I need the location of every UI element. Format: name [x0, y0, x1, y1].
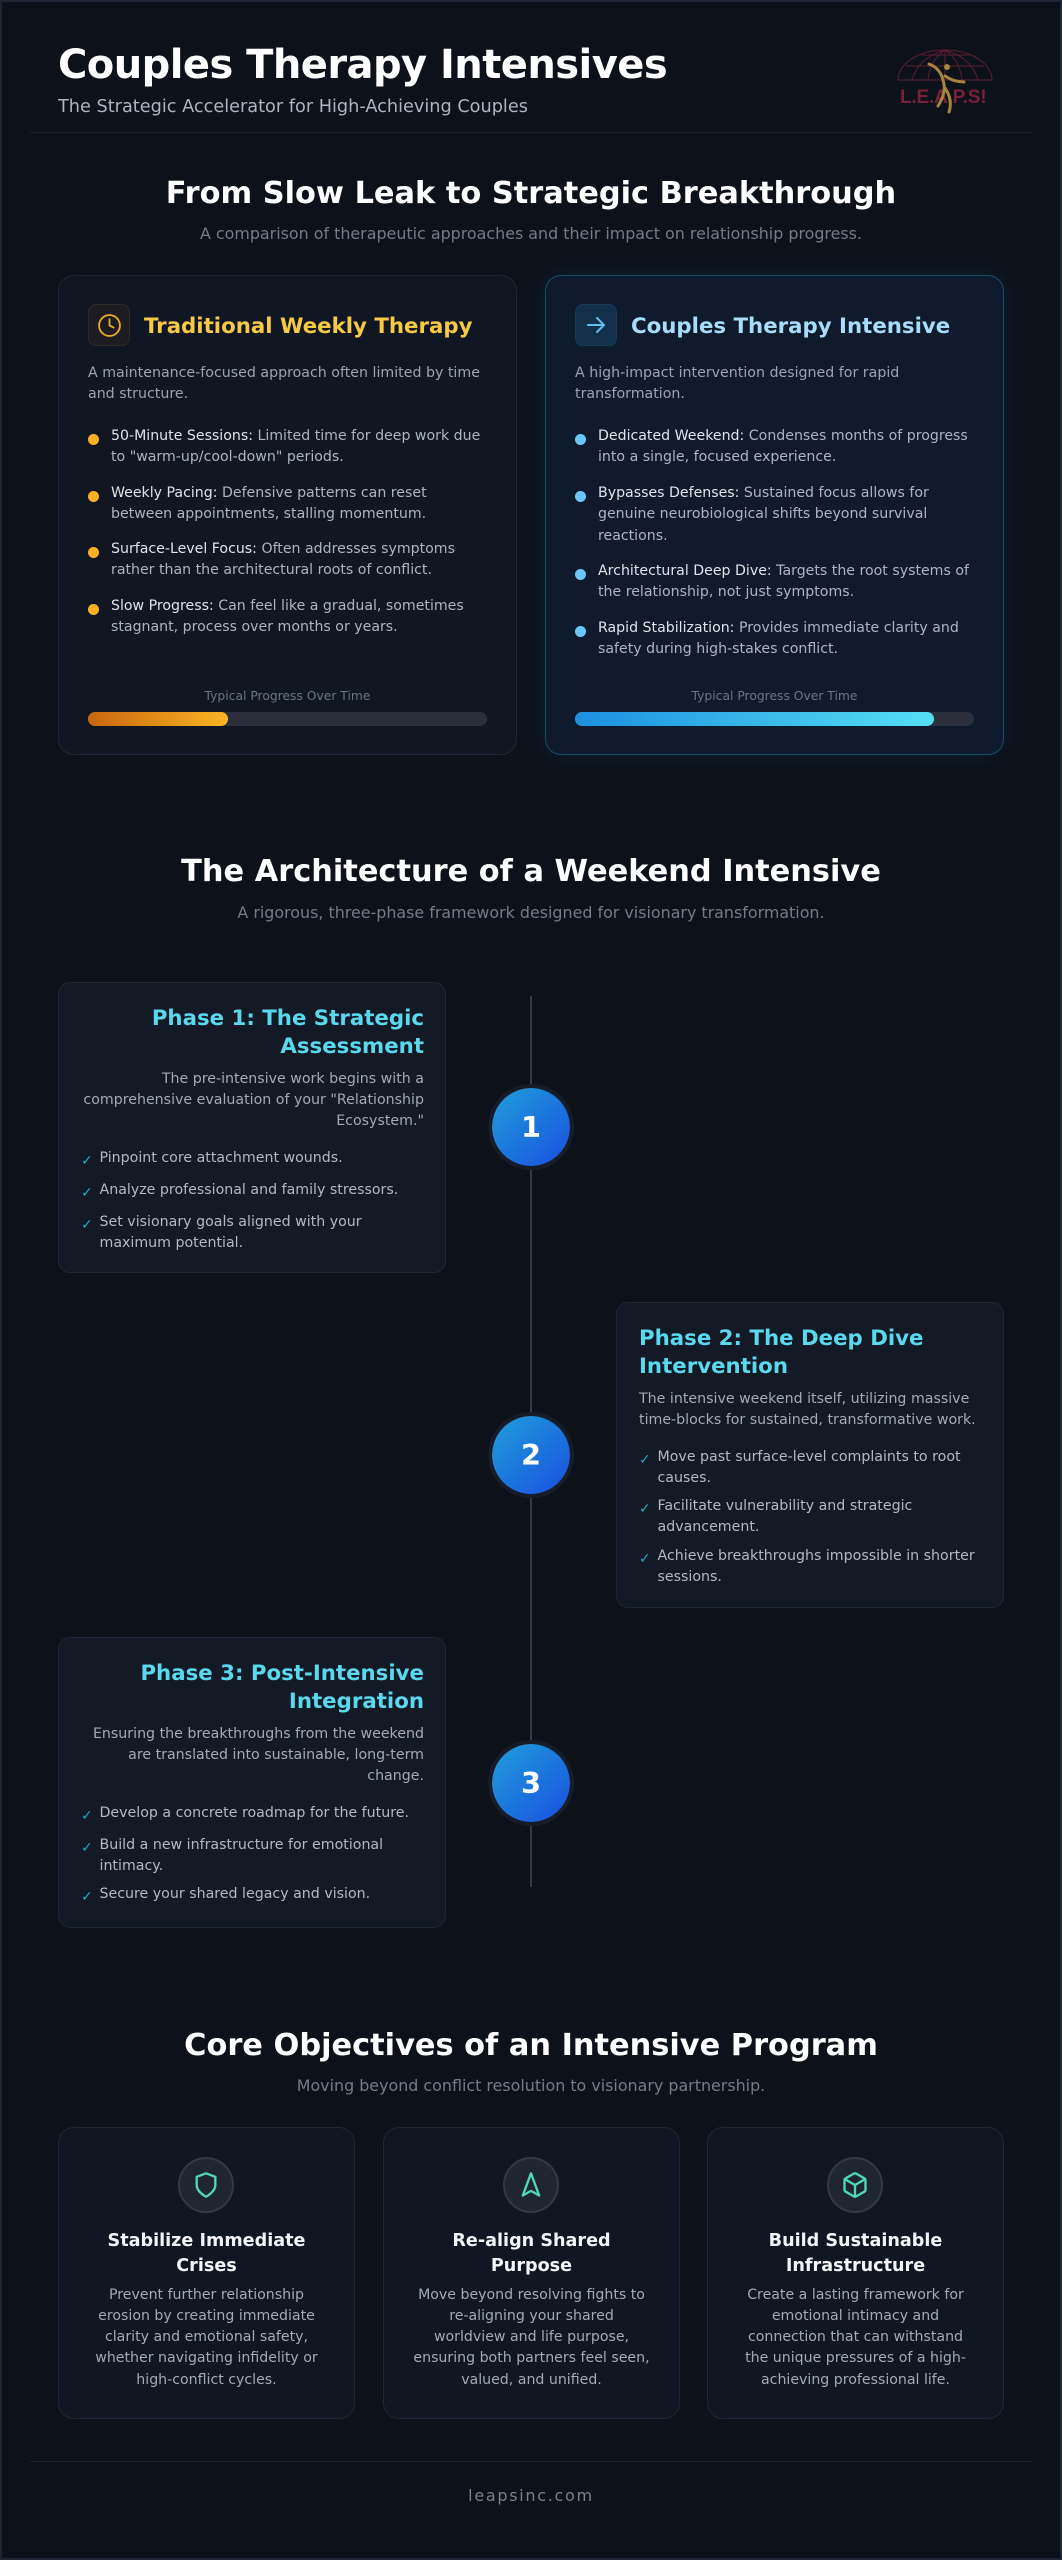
checklist item: intimacy. [100, 1858, 163, 1874]
phase title: Phase 1: The Strategic [152, 1006, 424, 1030]
checklist item: ✓ [81, 1153, 93, 1169]
list item: to "warm-up/cool-down" periods. [111, 449, 344, 465]
subtitle: The Strategic Accelerator for High-Achieving Couples [58, 97, 528, 117]
node 2 [488, 1412, 574, 1498]
objective description: whether navigating infidelity or [95, 2350, 318, 2366]
checklist item: sessions. [658, 1569, 722, 1585]
footer: leapsinc.com [468, 2486, 594, 2505]
list item: stagnant, process over months or years. [111, 619, 398, 635]
checklist item: ✓ [81, 1185, 93, 1201]
list item [575, 620, 959, 657]
list item: Bypasses Defenses: Sustained focus allows for [598, 485, 929, 501]
objective description [95, 2286, 318, 2388]
checklist item: Build a new infrastructure for emotional [100, 1837, 383, 1853]
progress bar [88, 712, 487, 726]
phase description: time-blocks for sustained, transformative work. [639, 1412, 976, 1428]
node 3 [488, 1740, 574, 1826]
objective description: re-aligning your shared [449, 2308, 614, 2324]
title: Couples Therapy Intensives [58, 42, 667, 88]
section heading: architecture: The Architecture of a Weekend Intensive [181, 854, 881, 888]
phase title [639, 1326, 924, 1379]
checklist item [639, 1548, 975, 1585]
checklist item [81, 1214, 362, 1251]
panel: traditional weekly therapy [58, 275, 517, 755]
list item: between appointments, stalling momentum. [111, 506, 426, 522]
phase title: Phase 2: The Deep Dive [639, 1326, 924, 1350]
checklist item: ✓ [81, 1840, 93, 1856]
header [58, 42, 992, 117]
objective description: ensuring both partners feel seen, [413, 2350, 650, 2366]
checklist item: advancement. [658, 1519, 759, 1535]
objective description: valued, and unified. [461, 2372, 602, 2388]
progress bar [575, 712, 974, 726]
phase description: comprehensive evaluation of your "Relationship [83, 1092, 424, 1108]
card description [88, 365, 480, 402]
objective description: emotional intimacy and [772, 2308, 939, 2324]
phase title [140, 1660, 424, 1714]
checklist item: ✓ [81, 1808, 93, 1824]
phase description: change. [367, 1768, 424, 1784]
objective title: Stabilize Immediate [108, 2230, 305, 2250]
list item: Weekly Pacing: Defensive patterns can reset [111, 485, 427, 501]
checklist item: Develop a concrete roadmap for the future. [100, 1805, 409, 1821]
list item: Dedicated Weekend: Condenses months of progress [598, 428, 968, 444]
objective title: Build Sustainable [769, 2230, 942, 2250]
checklist item: Pinpoint core attachment wounds. [100, 1150, 343, 1166]
progress label: Typical Progress Over Time [205, 688, 370, 702]
list item [88, 541, 455, 578]
objective description: Create a lasting framework for [747, 2286, 964, 2302]
objective description: worldview and life purpose, [434, 2329, 629, 2345]
icon: clock [88, 304, 130, 346]
phase description: Ecosystem." [336, 1113, 424, 1129]
list item: Architectural Deep Dive: Targets the root systems of [598, 563, 969, 579]
objective title: Crises [176, 2256, 237, 2276]
checklist item: Analyze professional and family stressors. [100, 1182, 398, 1198]
list item [88, 598, 464, 635]
section heading: objectives [184, 2028, 878, 2095]
list item [88, 428, 480, 465]
card title: Traditional Weekly Therapy [144, 314, 472, 338]
objective title: Re-align Shared [452, 2230, 611, 2250]
phase title: Assessment [280, 1034, 424, 1059]
icon: cube [827, 2157, 883, 2213]
checklist item: maximum potential. [100, 1235, 243, 1251]
panel: couples therapy intensive [545, 275, 1004, 755]
list item: Surface-Level Focus: Often addresses symptoms [111, 541, 455, 557]
checklist item: ✓ [81, 1889, 93, 1905]
phase title: Intervention [639, 1354, 788, 1379]
phase title: Integration [289, 1689, 424, 1714]
logo [898, 50, 992, 114]
icon: shield [178, 2157, 234, 2213]
checklist item: ✓ [639, 1452, 651, 1468]
objective title [769, 2230, 942, 2276]
checklist item: Move past surface-level complaints to root [658, 1449, 961, 1465]
section heading: objectives: Moving beyond conflict resolution to visionary partnership. [297, 2076, 765, 2095]
phase description [93, 1726, 424, 1784]
node 2: 2 [521, 1438, 541, 1472]
list item: Rapid Stabilization: Provides immediate clarity and [598, 620, 959, 636]
objective description [745, 2286, 966, 2388]
section heading: comparison: From Slow Leak to Strategic Breakthrough [166, 176, 896, 211]
list item [88, 485, 427, 522]
list item: 50-Minute Sessions: Limited time for deep work due [111, 428, 480, 444]
section heading: comparison: A comparison of therapeutic approaches and their impact on relationship progress. [200, 224, 862, 243]
list item: reactions. [598, 528, 668, 544]
objective description: erosion by creating immediate [98, 2308, 315, 2324]
list item: Slow Progress: Can feel like a gradual, sometimes [111, 598, 464, 614]
progress label: Typical Progress Over Time [692, 688, 857, 702]
panel: phase 3 [58, 1637, 446, 1928]
card description: transformation. [575, 386, 685, 402]
checklist item: Set visionary goals aligned with your [100, 1214, 362, 1230]
card description: and structure. [88, 386, 188, 402]
objective description: clarity and emotional safety, [105, 2329, 308, 2345]
objective description: Move beyond resolving fights to [418, 2286, 645, 2302]
objective title [108, 2230, 305, 2276]
list item [575, 485, 929, 544]
objective description: achieving professional life. [761, 2372, 950, 2388]
checklist item: ✓ [81, 1217, 93, 1233]
list item: genuine neurobiological shifts beyond survival [598, 506, 927, 522]
logo: L.E.A.P.S! [900, 87, 986, 108]
checklist item [81, 1837, 383, 1874]
timeline line [530, 996, 532, 1887]
list item: the relationship, not just symptoms. [598, 584, 854, 600]
phase title: Phase 3: Post-Intensive [140, 1660, 424, 1686]
objective description: Prevent further relationship [109, 2286, 304, 2302]
objective description [413, 2286, 650, 2388]
list item: safety during high-stakes conflict. [598, 641, 838, 657]
objective title: Purpose [491, 2256, 572, 2276]
objective title [452, 2230, 611, 2276]
panel: build sustainable infrastructure [707, 2127, 1004, 2419]
node 1 [488, 1084, 574, 1170]
panel: re-align shared purpose [383, 2127, 680, 2419]
list item: rather than the architectural roots of conflict. [111, 562, 432, 578]
panel: phase 2 [616, 1302, 1004, 1608]
phase description [638, 1390, 976, 1428]
icon: arrow [575, 304, 617, 346]
section heading: objectives: Core Objectives of an Intensive Program [184, 2028, 878, 2063]
phase description [83, 1070, 424, 1129]
checklist item: ✓ [639, 1551, 651, 1567]
objective description: the unique pressures of a high- [745, 2350, 966, 2366]
list item [575, 428, 968, 465]
checklist item: ✓ [639, 1501, 651, 1517]
card description: A maintenance-focused approach often limited by time [88, 365, 480, 381]
objective title: Infrastructure [786, 2256, 925, 2276]
card title: Couples Therapy Intensive [631, 314, 950, 338]
checklist item [639, 1498, 912, 1535]
panel: phase 1 [58, 982, 446, 1273]
card description [575, 365, 899, 402]
checklist item: Secure your shared legacy and vision. [100, 1886, 370, 1902]
phase title [152, 1006, 424, 1059]
phase description: The pre-intensive work begins with a [162, 1070, 424, 1086]
objective description: connection that can withstand [748, 2329, 963, 2345]
objective description: high-conflict cycles. [136, 2372, 277, 2388]
checklist item [639, 1449, 961, 1486]
checklist item: Achieve breakthroughs impossible in shorter [658, 1548, 975, 1564]
checklist item: Facilitate vulnerability and strategic [658, 1498, 912, 1514]
section heading: architecture [181, 854, 881, 922]
section heading: architecture: A rigorous, three-phase framework designed for visionary transformation. [237, 902, 825, 922]
panel: stabilize immediate crises [58, 2127, 355, 2419]
list item: into a single, focused experience. [598, 449, 836, 465]
phase description: Ensuring the breakthroughs from the weekend [93, 1726, 424, 1742]
card description: A high-impact intervention designed for rapid [575, 365, 899, 381]
node 1: 1 [521, 1110, 541, 1144]
phase description: are translated into sustainable, long-term [128, 1747, 424, 1763]
node 3: 3 [521, 1766, 541, 1800]
icon: navigation arrow [503, 2157, 559, 2213]
section heading: comparison [166, 176, 896, 243]
checklist item: causes. [658, 1470, 711, 1486]
list item [575, 563, 970, 600]
phase description: The intensive weekend itself, utilizing massive [639, 1390, 969, 1406]
